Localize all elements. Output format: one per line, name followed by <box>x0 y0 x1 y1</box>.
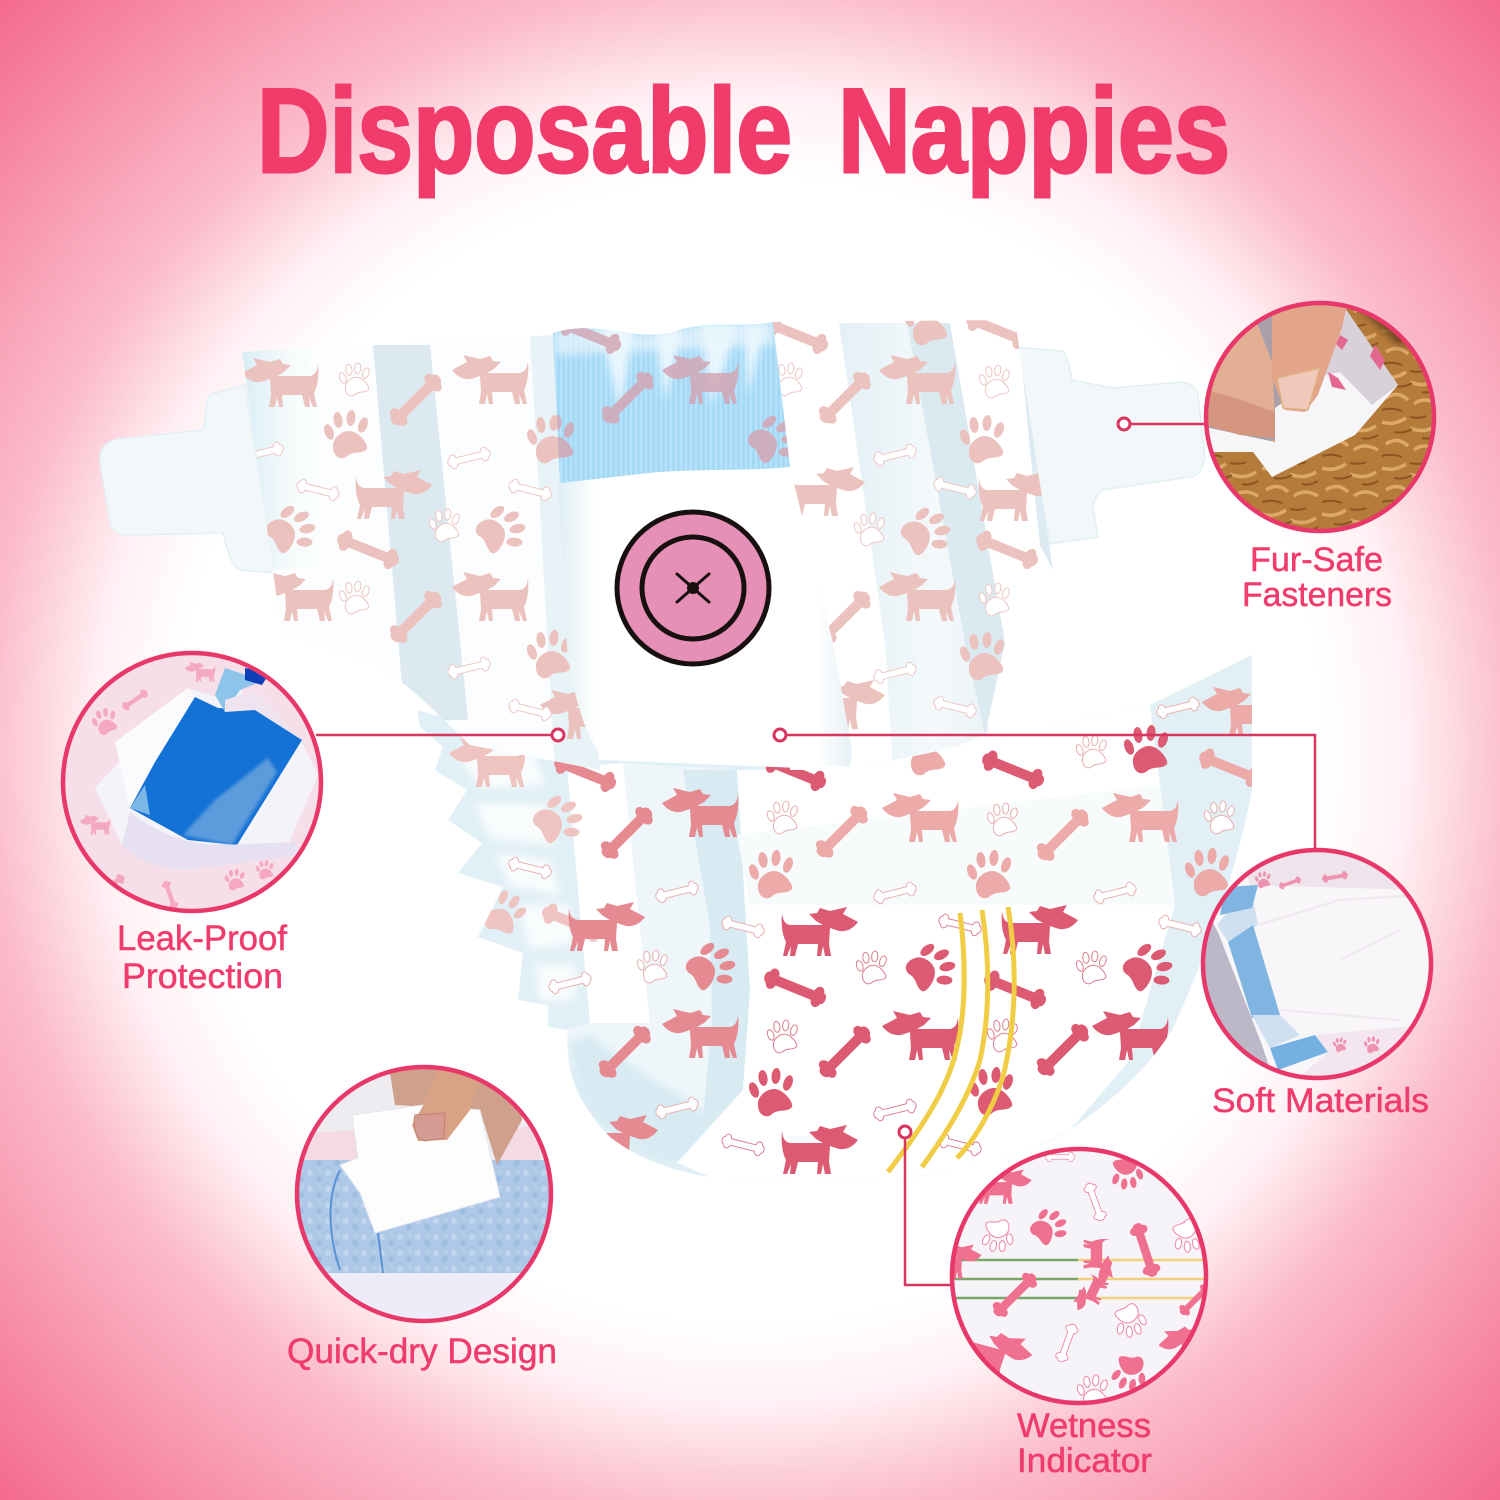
center white panel <box>558 467 852 767</box>
diaper illustration <box>100 297 1278 1190</box>
medium motifs <box>551 751 741 1164</box>
label: quick-dry design: Quick-dry Design <box>287 1332 557 1371</box>
photo: soft materials <box>1200 850 1435 1085</box>
blue inner leak guard <box>553 322 790 483</box>
label: soft materials: Soft Materials <box>1212 1082 1429 1120</box>
label: leak-proof protection: Leak-Proof <box>117 919 287 958</box>
label: fur-safe fasteners: Fur-Safe <box>1250 541 1383 579</box>
right fastener tab <box>1015 347 1205 544</box>
photo: leak-proof protection <box>60 650 325 915</box>
center button icon <box>617 512 769 664</box>
faded ruffle motifs <box>449 738 607 950</box>
title <box>257 64 1230 198</box>
label: wetness indicator <box>1017 1407 1152 1480</box>
band motifs <box>747 687 1278 898</box>
left diaper panel <box>242 335 600 770</box>
diaper lower body <box>410 650 1278 1190</box>
label: leak-proof protection: Protection <box>122 957 283 996</box>
label: wetness indicator: Indicator <box>1017 1442 1152 1480</box>
label: fur-safe fasteners: Fasteners <box>1242 576 1392 614</box>
label: leak-proof protection <box>117 919 287 996</box>
photo: wetness indicator <box>950 1146 1208 1406</box>
wetness indicator stripes <box>888 907 1014 1172</box>
strong motifs <box>747 725 1178 1174</box>
title: Disposable <box>257 64 792 198</box>
title: Nappies <box>838 64 1230 198</box>
label: wetness indicator: Wetness <box>1017 1407 1151 1445</box>
connector lines <box>316 418 1315 1285</box>
left fastener tab <box>100 385 275 573</box>
photo: fur-safe fasteners <box>1200 300 1440 535</box>
photo: quick-dry design <box>295 1058 555 1330</box>
right diaper panel <box>772 320 1053 770</box>
label: fur-safe fasteners <box>1242 541 1392 614</box>
